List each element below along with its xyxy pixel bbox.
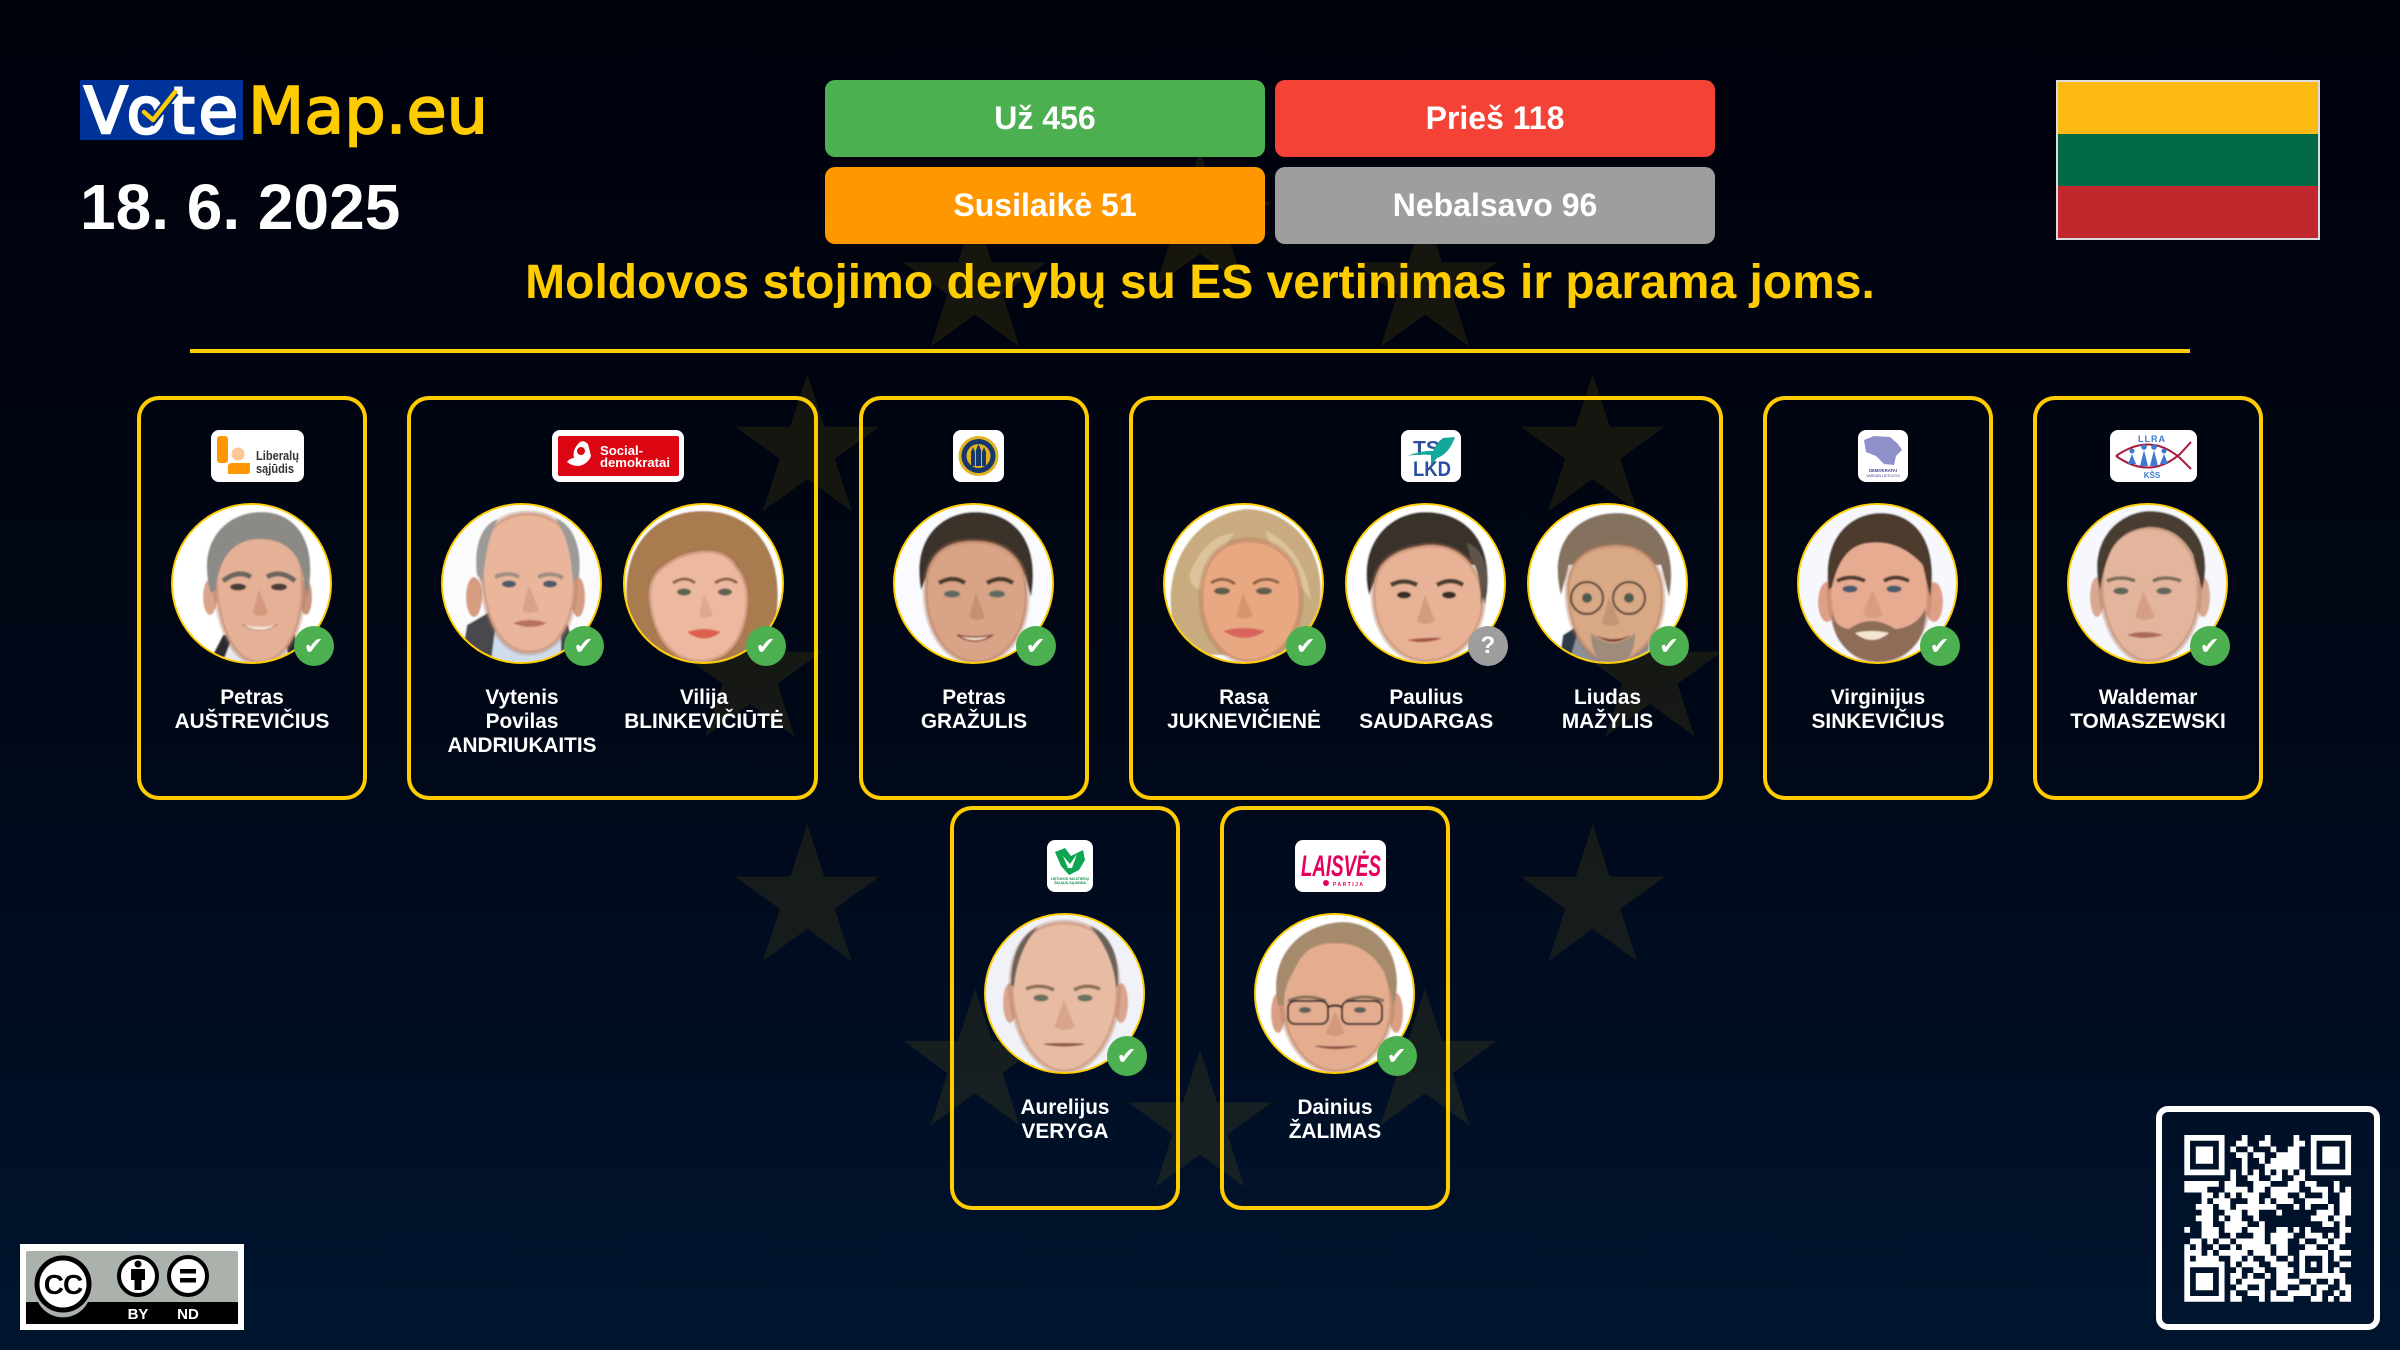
person: Rasa Juknevičienė [1163, 503, 1326, 733]
name [1562, 686, 1653, 733]
name [2070, 686, 2226, 733]
licence badge: CC BY-ND: BY [128, 1306, 148, 1323]
name [1167, 686, 1321, 733]
vote count: against [1275, 80, 1715, 157]
party logo: Demokratai vardan Lietuvos: DEMOKRATAI [1869, 468, 1897, 473]
name [1359, 686, 1493, 733]
portrait [171, 503, 332, 664]
party logo: Socialdemokratai: demokratai [600, 455, 670, 470]
vote badge: for: ✔ [1025, 632, 1046, 660]
vote badge: for [1649, 626, 1689, 666]
portrait [893, 503, 1054, 664]
portrait [623, 503, 784, 664]
name: BLINKEVIČIŪTĖ [624, 710, 784, 733]
portrait [1345, 503, 1506, 664]
vote badge: for [1286, 626, 1326, 666]
vote count: for: Už 456 [994, 100, 1096, 136]
party logo: Liberalų sąjūdis [211, 430, 304, 482]
name: Vilija [680, 686, 728, 709]
licence badge: CC BY-ND: CC [44, 1269, 83, 1300]
person: Paulius Saudargas [1345, 503, 1508, 733]
date: 18. 6. 2025 [80, 171, 400, 243]
name: Virginijus [1831, 686, 1925, 709]
portrait [1254, 913, 1415, 1074]
vote badge: for [1376, 1036, 1416, 1076]
name: GRAŽULIS [921, 710, 1027, 733]
name: AUŠTREVIČIUS [175, 710, 329, 733]
flag: Lithuania [2056, 80, 2320, 240]
panel: LLRA-KŠS [2033, 396, 2263, 800]
name: Rasa [1219, 686, 1269, 709]
portrait [1163, 503, 1324, 664]
logo: VoteMap.eu [80, 75, 488, 149]
vote badge: for: ✔ [1659, 632, 1679, 660]
portrait [984, 913, 1145, 1074]
name: MAŽYLIS [1562, 710, 1653, 733]
vote badge: for [1016, 626, 1056, 666]
name [175, 686, 329, 733]
panel: Laisvės partija [1220, 806, 1450, 1210]
person: Aurelijus Veryga [984, 913, 1147, 1143]
person: Waldemar Tomaszewski [2067, 503, 2230, 733]
portrait [1797, 503, 1958, 664]
QR code [2156, 1106, 2380, 1330]
portrait [2067, 503, 2228, 664]
licence badge: CC BY-ND: ND [177, 1306, 199, 1323]
licence badge: CC BY-ND [20, 1244, 244, 1330]
vote badge: for: ✔ [755, 632, 776, 660]
party logo: green union: LIETUVOS VALSTIEČIŲ [1051, 876, 1089, 881]
name: Povilas [486, 710, 558, 733]
panel: Petras Gražulis, independent [859, 396, 1089, 800]
name: Dainius [1297, 1096, 1373, 1119]
person: Vilija Blinkevičiūtė [623, 503, 786, 733]
name: Paulius [1389, 686, 1463, 709]
party logo: green union: ŽALIŲJŲ SĄJUNGA [1054, 880, 1086, 885]
vote count: did not vote: Nebalsavo 96 [1393, 187, 1597, 223]
vote badge: unknown [1468, 626, 1508, 666]
person: Liudas Mažylis [1527, 503, 1689, 733]
vote badge: for [1920, 626, 1960, 666]
portrait [441, 503, 602, 664]
vote count: did not vote [1275, 167, 1715, 244]
name [624, 686, 784, 733]
party logo: Socialdemokratai: Social- [600, 443, 643, 458]
logo: VoteMap.eu: Vote [84, 75, 238, 149]
vote badge: for [294, 626, 334, 666]
party logo: TS-LKD: TS [1413, 438, 1440, 460]
person: Dainius Žalimas [1254, 913, 1417, 1143]
party logo: LLRA-KŠS [2110, 430, 2197, 482]
vote badge: for: ✔ [1929, 632, 1950, 660]
name: Vytenis [485, 686, 559, 709]
logo: VoteMap.eu: Map.eu [248, 75, 488, 149]
panel: Liberalų sąjūdis [137, 396, 367, 800]
name: Petras [220, 686, 284, 709]
vote badge: for [1106, 1036, 1146, 1076]
vote badge: for: ✔ [2199, 632, 2220, 660]
party logo: TS-LKD: LKD [1413, 458, 1451, 481]
name: Waldemar [2099, 686, 2197, 709]
name [1812, 686, 1944, 733]
party logo: Laisvės partija [1295, 840, 1386, 892]
vote count: for [825, 80, 1265, 157]
name [921, 686, 1027, 733]
vote badge: for: ✔ [1295, 632, 1316, 660]
name [1289, 1096, 1381, 1143]
panel: TS-LKD [1129, 396, 1723, 800]
vote badge: for: ✔ [1386, 1042, 1407, 1070]
panel: Socialdemokratai [407, 396, 818, 800]
vote badge: for [564, 626, 604, 666]
party logo: Socialdemokratai [552, 430, 684, 482]
name: VERYGA [1021, 1120, 1109, 1143]
person: Virginijus Sinkevičius [1797, 503, 1960, 733]
name: TOMASZEWSKI [2070, 710, 2226, 733]
name: Petras [942, 686, 1006, 709]
vote badge: for: ✔ [1116, 1042, 1137, 1070]
party logo: Laisvės partija: PARTIJA [1333, 882, 1365, 888]
name: Aurelijus [1020, 1096, 1110, 1119]
vote badge: for: ✔ [573, 632, 594, 660]
party logo: TS-LKD [1401, 430, 1461, 482]
vote count: abstained [825, 167, 1265, 244]
person: Petras Gražulis [893, 503, 1056, 733]
person: Vytenis Povilas Andriukaitis [441, 503, 604, 757]
vote count: against: Prieš 118 [1426, 100, 1564, 136]
panel: Lietuvos valstiečių ir žaliųjų sąjunga [950, 806, 1180, 1210]
title: Moldovos stojimo derybų su ES vertinimas ir parama joms. [525, 256, 1875, 309]
party logo: LLRA-KŠS: KŠS [2144, 471, 2161, 480]
name: JUKNEVIČIENĖ [1167, 710, 1321, 733]
name: SINKEVIČIUS [1812, 710, 1944, 733]
name: ANDRIUKAITIS [447, 734, 597, 757]
name: Liudas [1574, 686, 1641, 709]
vote badge: unknown: ? [1480, 632, 1495, 659]
party logo: Demokratai vardan Lietuvos: VARDAN LIETUVOS [1866, 474, 1900, 478]
party logo: round crest [953, 430, 1004, 482]
party logo: LLRA-KŠS: LLRA [2138, 434, 2166, 444]
vote badge: for: ✔ [303, 632, 324, 660]
person: Petras Auštrevičius [171, 503, 334, 733]
vote badge: for [746, 626, 786, 666]
name: SAUDARGAS [1359, 710, 1493, 733]
name: ŽALIMAS [1289, 1120, 1381, 1143]
panel: Demokratai vardan Lietuvos [1763, 396, 1993, 800]
party logo: Demokratai vardan Lietuvos [1858, 430, 1908, 482]
portrait [1526, 503, 1688, 664]
vote badge: for [2190, 626, 2230, 666]
name [1020, 1096, 1110, 1143]
party logo: Liberalų sąjūdis: sąjūdis [256, 461, 294, 476]
vote count: abstained: Susilaikė 51 [953, 187, 1137, 223]
name [447, 686, 597, 757]
party logo: green union [1047, 840, 1093, 892]
